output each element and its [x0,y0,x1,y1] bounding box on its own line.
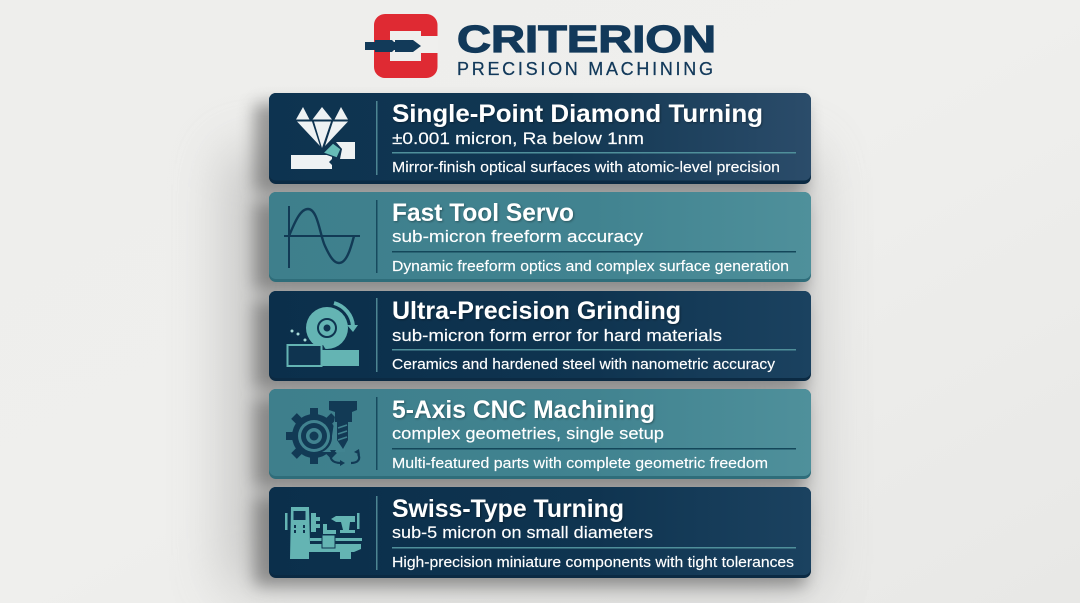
icon: sine wave [284,206,360,268]
icon: lathe [285,507,362,559]
icon: gear and drill [286,401,360,466]
icon: grinding wheel [288,303,359,366]
panel: Swiss-Type Turning [269,487,811,578]
heading: Fast Tool Servo [392,199,574,227]
description: Dynamic freeform optics and complex surface generation [392,258,789,275]
specification: sub-micron freeform accuracy [392,227,644,246]
heading: Single-Point Diamond Turning [392,100,763,128]
description: Mirror-finish optical surfaces with atomic-level precision [392,159,780,176]
description: Ceramics and hardened steel with nanometric accuracy [392,356,776,373]
description: Multi-featured parts with complete geometric freedom [392,455,768,472]
tagline: PRECISION MACHINING [457,59,713,79]
specification: ±0.001 micron, Ra below 1nm [392,129,644,148]
panel: Ultra-Precision Grinding [269,291,811,381]
wordmark: CRITERION [457,19,716,61]
panel: 5-Axis CNC Machining [269,389,811,479]
logo [365,14,716,79]
panel: Fast Tool Servo [269,192,811,282]
specification: complex geometries, single setup [392,424,664,443]
heading: Swiss-Type Turning [392,495,624,523]
logo mark: red C with spindle [365,14,438,78]
panel: Single-Point Diamond Turning [269,93,811,184]
specification: sub-micron form error for hard materials [392,326,722,345]
heading: 5-Axis CNC Machining [392,396,655,424]
specification: sub-5 micron on small diameters [392,523,653,542]
icon: diamond tool [291,107,355,169]
description: High-precision miniature components with tight tolerances [392,554,794,571]
heading: Ultra-Precision Grinding [392,297,681,325]
